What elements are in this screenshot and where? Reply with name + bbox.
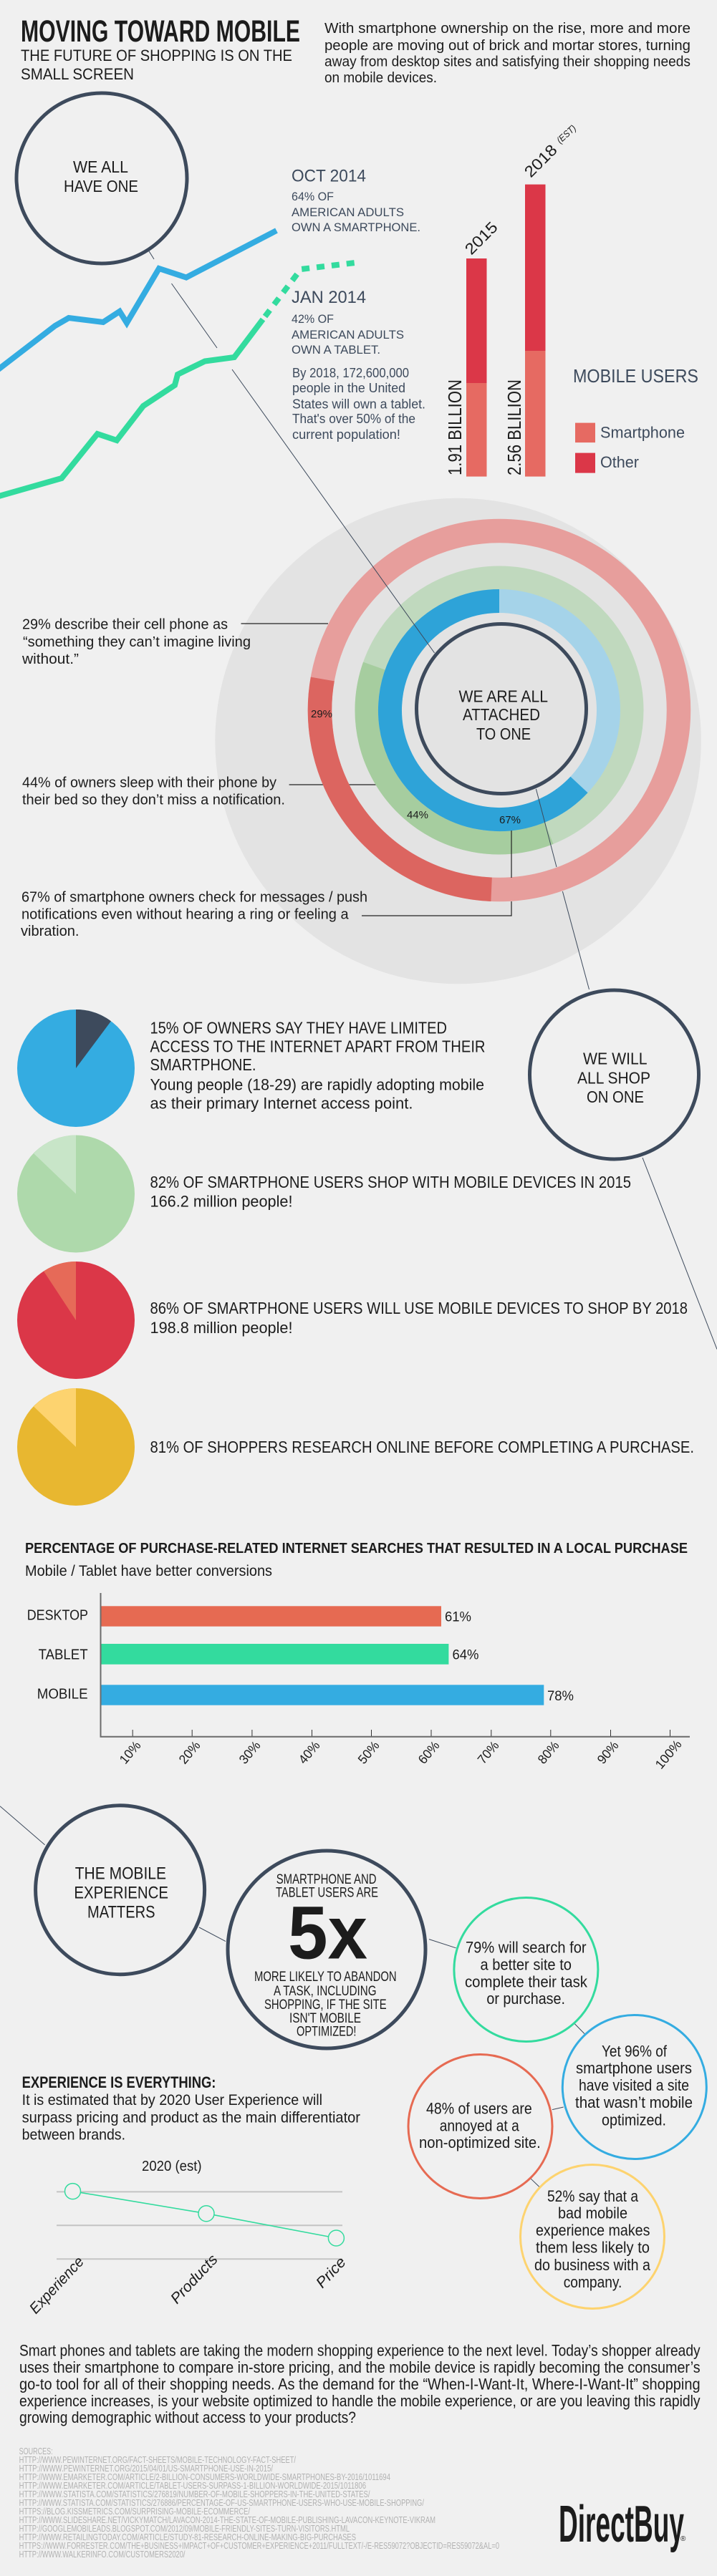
axis labels: 100% bbox=[653, 1737, 685, 1772]
circle: 5x more likely: ISN'T MOBILE bbox=[289, 2011, 361, 2026]
bubble: 79 percent: a better site to bbox=[480, 1955, 572, 1973]
mobile bar: MOBILE bbox=[37, 1687, 88, 1703]
stat: limited access: ACCESS TO THE INTERNET APART FROM THEIR bbox=[150, 1037, 486, 1055]
smartphone stat: OCT 2014 bbox=[292, 166, 366, 186]
legend: mobile users: MOBILE USERS bbox=[573, 365, 698, 387]
sources: HTTP://WWW.EMARKETER.COM/ARTICLE/2-BILLION-CONSUMERS-WORLDWIDE-SMARTPHONES-BY-2016/1011694 bbox=[19, 2471, 390, 2482]
logo: DirectBuy: ® bbox=[680, 2535, 686, 2543]
bubble: 48 percent: non-optimized site. bbox=[419, 2134, 541, 2151]
sources: HTTP://WWW.EMARKETER.COM/ARTICLE/TABLET-USERS-SURPASS-1-BILLION-WORLDWIDE-2015/1011806 bbox=[19, 2480, 366, 2491]
desktop bar: 61% bbox=[445, 1610, 471, 1625]
bubble: 52 percent: company. bbox=[564, 2273, 622, 2291]
bubble: 52 percent: bad mobile bbox=[558, 2204, 627, 2222]
axis labels: 80% bbox=[535, 1738, 562, 1767]
bubble connectors bbox=[199, 1927, 584, 2187]
circle: 5x more likely: SMARTPHONE AND bbox=[276, 1872, 377, 1887]
sources: HTTPS://BLOG.KISSMETRICS.COM/SURPRISING-MOBILE-ECOMMERCE/ bbox=[19, 2506, 250, 2517]
stat: limited access: Young people (18-29) are rapidly adopting mobile bbox=[150, 1076, 484, 1094]
sources: HTTP://WWW.SLIDESHARE.NET/VICKYMATCH/LAVACON-2014-THE-STATE-OF-MOBILE-PUBLISHING-LAVACON-KEYNOTE-VIKRAM bbox=[19, 2514, 436, 2525]
stat: 29 percent: 29% describe their cell phone as bbox=[22, 617, 228, 633]
bubble: 52 percent: 52% say that a bbox=[547, 2187, 639, 2205]
circle: we are all attached to one: TO ONE bbox=[476, 725, 531, 743]
circle: we will all shop on one: ON ONE bbox=[587, 1088, 644, 1106]
tablet bar bbox=[39, 1644, 479, 1665]
connector line: shop circle to experience circle bbox=[0, 1158, 717, 1845]
circle: the mobile experience matters: EXPERIENCE bbox=[74, 1883, 168, 1903]
stat: 67 percent: 67% of smartphone owners check for messages / push bbox=[21, 889, 367, 905]
stat: limited access: as their primary Internet access point. bbox=[150, 1094, 413, 1112]
sources: HTTP://WWW.STATISTA.COM/STATISTICS/276886/PERCENTAGE-OF-US-SMARTPHONE-USERS-WHO-USE-MOBILE-SHOPPING/ bbox=[19, 2497, 424, 2508]
bar chart: mobile users bbox=[444, 122, 578, 477]
legend: mobile users: Smartphone bbox=[600, 424, 685, 442]
text block: experience is everything: It is estimated that by 2020 User Experience will bbox=[22, 2092, 322, 2108]
axis labels: 10% bbox=[117, 1738, 144, 1767]
sources: SOURCES: bbox=[19, 2446, 53, 2456]
bubble: 48 percent: annoyed at a bbox=[440, 2116, 519, 2135]
axis labels: 50% bbox=[355, 1738, 382, 1767]
axis labels: 40% bbox=[296, 1738, 323, 1767]
radial chart bbox=[311, 531, 679, 889]
line chart: 2020 estimate bbox=[27, 2159, 350, 2317]
stat: 86 percent: 198.8 million people! bbox=[150, 1319, 292, 1337]
tablet stat bbox=[292, 288, 425, 442]
title: MOVING TOWARD MOBILE bbox=[21, 14, 300, 49]
tablet stat: JAN 2014 bbox=[292, 288, 366, 307]
circle: we all have one: HAVE ONE bbox=[64, 177, 138, 195]
sources: HTTP://WWW.STATISTA.COM/STATISTICS/276819/NUMBER-OF-MOBILE-SHOPPERS-IN-THE-UNITED-STATES/ bbox=[19, 2489, 370, 2499]
bubble: 79 percent: complete their task bbox=[465, 1973, 588, 1990]
tablet stat: current population! bbox=[292, 427, 400, 442]
connector line: we all have one to attached bbox=[149, 251, 217, 348]
axes bbox=[100, 1593, 690, 1737]
ticks bbox=[133, 1730, 670, 1736]
legend: mobile users bbox=[573, 365, 698, 473]
stat: 29 percent bbox=[21, 617, 328, 667]
ring: 29 percent bbox=[319, 531, 679, 889]
bubble: 79 percent: or purchase. bbox=[486, 1990, 565, 2008]
category labels: Products bbox=[168, 2251, 221, 2307]
circle: the mobile experience matters: THE MOBILE bbox=[75, 1864, 166, 1883]
sources: HTTP://WWW.WALKERINFO.COM/CUSTOMERS2020/ bbox=[19, 2549, 186, 2560]
axis labels bbox=[117, 1737, 685, 1772]
leader line: 44 percent bbox=[289, 784, 376, 785]
tablet stat: 42% OF bbox=[292, 312, 334, 326]
stat: 82 percent: 82% OF SMARTPHONE USERS SHOP WITH MOBILE DEVICES IN 2015 bbox=[150, 1173, 631, 1191]
circle: 5x more likely: OPTIMIZED! bbox=[297, 2025, 356, 2040]
heading: conversions chart: Mobile / Tablet have better conversions bbox=[25, 1563, 272, 1579]
tablet projection dashed bbox=[265, 262, 361, 316]
circle: we are all attached to one: ATTACHED bbox=[463, 705, 540, 724]
intro text: With smartphone ownership on the rise, more and more bbox=[324, 21, 690, 37]
connector line: attached to shop circle bbox=[536, 789, 589, 989]
tablet stat: people in the United bbox=[292, 381, 405, 395]
tablet bar: TABLET bbox=[39, 1647, 88, 1663]
tablet line bbox=[0, 319, 263, 497]
smartphone stat: 64% OF bbox=[292, 190, 334, 203]
smartphone stat: AMERICAN ADULTS bbox=[292, 205, 404, 219]
category labels bbox=[27, 2251, 350, 2317]
sources: HTTP://GOOGLEMOBILEADS.BLOGSPOT.COM/2012/09/MOBILE-FRIENDLY-SITES-TURN-VISITORS.HTML bbox=[19, 2523, 350, 2534]
category labels: Price bbox=[313, 2254, 350, 2291]
bar 2015: 1.91 BILLION bbox=[444, 379, 466, 475]
title bbox=[21, 14, 300, 83]
bar 2015 bbox=[444, 218, 501, 477]
circle: 5x more likely: TABLET USERS ARE bbox=[276, 1885, 378, 1900]
circle: the mobile experience matters: MATTERS bbox=[87, 1902, 155, 1922]
circle: we are all attached to one bbox=[417, 624, 586, 793]
ring labels: 29% bbox=[311, 708, 332, 720]
stat: 82 percent bbox=[150, 1173, 631, 1211]
stat: 67 percent: vibration. bbox=[21, 924, 79, 939]
bubble: 52 percent: do business with a bbox=[534, 2256, 651, 2274]
stat: limited access: 15% OF OWNERS SAY THEY HAVE LIMITED bbox=[150, 1019, 447, 1037]
bubble: 79 percent bbox=[454, 1897, 598, 2042]
pie: 82 percent shop with mobile bbox=[17, 1136, 135, 1253]
circle: we will all shop on one bbox=[530, 990, 699, 1159]
desktop bar bbox=[27, 1606, 471, 1627]
sources: HTTP://WWW.RETAILINGTODAY.COM/ARTICLE/STUDY-81-RESEARCH-ONLINE-MAKING-BIG-PURCHASES bbox=[19, 2532, 356, 2542]
sources: HTTPS://WWW.FORRESTER.COM/THE+BUSINESS+IMPACT+OF+CUSTOMER+EXPERIENCE+2011/FULLTEXT/-/E-RES59072?OBJECTID=RES59072&AL=0 bbox=[19, 2540, 499, 2551]
tablet stat: States will own a tablet. bbox=[292, 397, 425, 411]
line chart: 2020 estimate: 2020 (est) bbox=[142, 2159, 202, 2174]
stat: 82 percent: 166.2 million people! bbox=[150, 1193, 292, 1211]
bubble: 96 percent bbox=[562, 2015, 706, 2159]
bubble: 96 percent: have visited a site bbox=[579, 2076, 689, 2094]
ring: 44 percent bbox=[367, 578, 632, 843]
tablet stat: That's over 50% of the bbox=[292, 412, 415, 426]
tablet stat: By 2018, 172,600,000 bbox=[292, 366, 409, 380]
closing paragraph: growing demographic without access to your products? bbox=[19, 2408, 356, 2426]
bubble: 79 percent: 79% will search for bbox=[466, 1938, 587, 1956]
text block: experience is everything bbox=[22, 2073, 360, 2143]
bar 2018 bbox=[504, 122, 578, 477]
circle: 5x more likely: MORE LIKELY TO ABANDON bbox=[254, 1970, 397, 1985]
circle: we will all shop on one: WE WILL bbox=[583, 1050, 648, 1068]
bar chart: conversions bbox=[27, 1593, 690, 1772]
intro text bbox=[324, 21, 690, 86]
bubble: 96 percent: optimized. bbox=[602, 2111, 666, 2129]
axis labels: 70% bbox=[475, 1738, 502, 1767]
sources bbox=[19, 2446, 499, 2560]
pie: 15 percent limited access bbox=[17, 1009, 135, 1127]
axis labels: 60% bbox=[415, 1738, 443, 1767]
bar 2018: 2.56 BLILION bbox=[504, 379, 525, 475]
circle: we all have one: WE ALL bbox=[73, 158, 128, 176]
title: SMALL SCREEN bbox=[21, 65, 134, 83]
stat: limited access: SMARTPHONE. bbox=[150, 1055, 256, 1074]
stat: 86 percent bbox=[150, 1299, 688, 1337]
stat: limited access bbox=[150, 1019, 486, 1112]
sources: HTTP://WWW.PEWINTERNET.ORG/FACT-SHEETS/MOBILE-TECHNOLOGY-FACT-SHEET/ bbox=[19, 2454, 296, 2465]
axis labels: 20% bbox=[176, 1738, 203, 1767]
stat: 44 percent bbox=[22, 775, 285, 808]
intro text: on mobile devices. bbox=[324, 70, 437, 86]
bubble: 48 percent: 48% of users are bbox=[426, 2100, 532, 2118]
text block: experience is everything: between brands. bbox=[22, 2126, 125, 2143]
stat: 44 percent: 44% of owners sleep with their phone by bbox=[22, 775, 276, 791]
bubble: 48 percent bbox=[408, 2055, 552, 2198]
title: THE FUTURE OF SHOPPING IS ON THE bbox=[21, 47, 292, 64]
heading: conversions chart bbox=[25, 1540, 688, 1579]
stat: 29 percent: without.” bbox=[21, 652, 79, 667]
bubble: 52 percent: experience makes bbox=[536, 2222, 650, 2240]
circle: we are all attached to one: WE ARE ALL bbox=[458, 687, 548, 705]
text block: experience is everything: surpass pricing and product as the main differentiator bbox=[22, 2110, 360, 2126]
circle: we all have one bbox=[16, 93, 187, 263]
smartphone line bbox=[0, 231, 276, 371]
intro text: people are moving out of brick and mortar stores, turning bbox=[324, 38, 690, 54]
line chart: smartphone and tablet ownership bbox=[0, 231, 361, 497]
backdrop circle bbox=[215, 498, 701, 984]
circle: 5x more likely: A TASK, INCLUDING bbox=[274, 1984, 377, 1999]
intro text: away from desktop sites and satisfying their shopping needs bbox=[324, 54, 690, 70]
ring labels bbox=[311, 708, 521, 826]
ring: 67 percent bbox=[390, 601, 609, 819]
ring labels: 44% bbox=[407, 809, 428, 821]
legend: mobile users: Other bbox=[600, 453, 639, 471]
smartphone stat: OWN A SMARTPHONE. bbox=[292, 221, 420, 234]
desktop bar: DESKTOP bbox=[27, 1608, 88, 1624]
mobile bar bbox=[37, 1685, 574, 1705]
mobile bar: 78% bbox=[547, 1689, 574, 1704]
stat: 67 percent: notifications even without hearing a ring or feeling a bbox=[21, 907, 349, 923]
axis labels: 90% bbox=[595, 1738, 622, 1767]
closing paragraph bbox=[19, 2342, 701, 2426]
bubble: 96 percent: Yet 96% of bbox=[602, 2042, 668, 2060]
category labels: Experience bbox=[27, 2254, 87, 2317]
circle: we will all shop on one: ALL SHOP bbox=[577, 1068, 650, 1087]
stat: 44 percent: their bed so they don’t miss a notification. bbox=[22, 793, 285, 808]
pie: 86 percent will shop bbox=[17, 1262, 135, 1379]
circle: 5x more likely bbox=[228, 1851, 425, 2048]
stat: 29 percent: “something they can’t imagine living bbox=[23, 634, 251, 650]
bar 2018: 2018 bbox=[521, 141, 561, 181]
connector line: to attached circle bbox=[232, 369, 435, 653]
stat: 67 percent bbox=[21, 831, 511, 939]
pie: 81 percent research bbox=[17, 1388, 135, 1506]
sources: HTTP://WWW.PEWINTERNET.ORG/2015/04/01/US-SMARTPHONE-USE-IN-2015/ bbox=[19, 2463, 273, 2474]
bar 2018: (EST) bbox=[554, 122, 578, 145]
circle: 5x more likely: 5x bbox=[288, 1891, 367, 1975]
text block: experience is everything: EXPERIENCE IS EVERYTHING: bbox=[22, 2073, 216, 2091]
bubble: 52 percent bbox=[520, 2165, 665, 2308]
ring labels: 67% bbox=[499, 814, 521, 826]
bar 2015: 2015 bbox=[461, 218, 501, 258]
bubble: 52 percent: them less likely to bbox=[536, 2239, 650, 2257]
circle: the mobile experience matters bbox=[36, 1806, 205, 1975]
bubble: 96 percent: that wasn’t mobile bbox=[575, 2093, 693, 2111]
circle: 5x more likely: SHOPPING, IF THE SITE bbox=[264, 1998, 387, 2013]
tablet stat: OWN A TABLET. bbox=[292, 343, 380, 357]
bubble: 96 percent: smartphone users bbox=[576, 2059, 692, 2077]
smartphone stat bbox=[292, 166, 420, 234]
tablet stat: AMERICAN ADULTS bbox=[292, 328, 404, 342]
axis labels: 30% bbox=[236, 1738, 264, 1767]
tablet bar: 64% bbox=[453, 1648, 479, 1663]
